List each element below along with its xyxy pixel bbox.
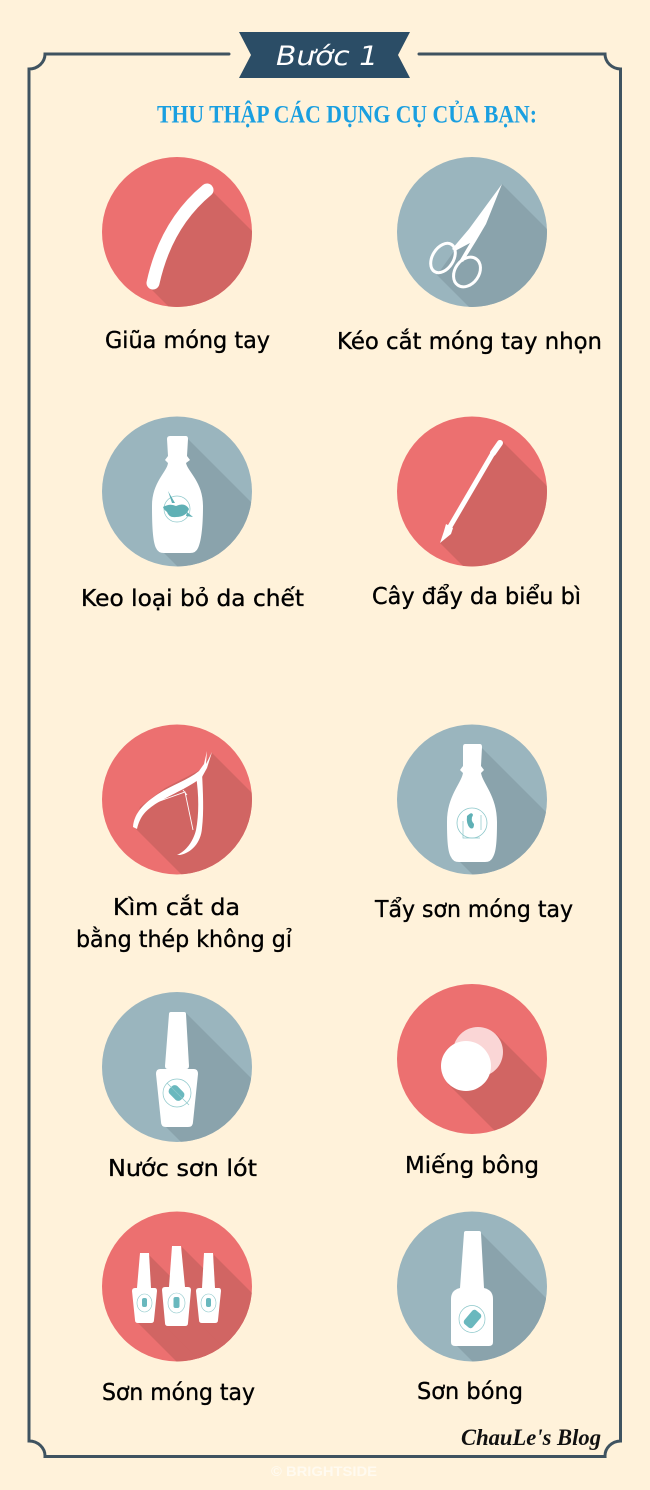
badge circle (397, 157, 547, 307)
watermark: © BRIGHTSIDE (271, 1463, 377, 1479)
item: scissors (339, 157, 600, 354)
icon: nail file (153, 190, 207, 283)
icon: nippers (133, 751, 212, 855)
label: Nước sơn lót (108, 1156, 257, 1182)
long shadows (138, 1247, 252, 1362)
long shadow (460, 748, 546, 874)
label: Kéo cắt móng tay nhọn (337, 328, 602, 355)
label: Sơn bóng (417, 1379, 523, 1405)
long shadow (135, 753, 252, 874)
ribbon text: Bước 1 (276, 41, 378, 72)
long shadow (164, 439, 252, 566)
item: nail polish set (102, 1212, 254, 1406)
badge circle (102, 1212, 252, 1362)
item: cotton pads (397, 984, 547, 1178)
icon: bottle (152, 436, 203, 553)
long shadow (448, 1034, 544, 1130)
label: Tẩy sơn móng tay (374, 897, 573, 923)
label: Miếng bông (405, 1153, 539, 1179)
title: THU THẬP CÁC DỤNG CỤ CỦA BẠN: (157, 100, 537, 128)
label: Giũa móng tay (105, 328, 270, 354)
badge circle (397, 416, 547, 566)
item: nail polish remover (374, 724, 573, 922)
blog signature: ChauLe's Blog (461, 1425, 601, 1450)
item: base coat (102, 992, 257, 1176)
icon: polish bottle (451, 1231, 493, 1346)
long shadow (152, 192, 252, 307)
badge circle (102, 157, 252, 307)
label: Cây đẩy da biểu bì (372, 584, 581, 610)
label: Keo loại bỏ da chết (81, 586, 304, 612)
badge circle (102, 416, 252, 566)
badge circle (102, 992, 252, 1142)
icon: bottle (447, 744, 497, 862)
item: top coat (397, 1212, 547, 1404)
long shadow (457, 1233, 546, 1362)
badge circle (397, 724, 547, 874)
long shadow (440, 442, 547, 566)
item: cuticle nippers (78, 724, 292, 952)
label: Kìm cắt da (113, 894, 240, 921)
ribbon shape (239, 32, 410, 78)
icon: three polish bottles (132, 1246, 221, 1326)
icon: polish bottle (156, 1012, 198, 1127)
badge circle (397, 1212, 547, 1362)
label: Sơn móng tay (102, 1380, 255, 1406)
icon: cotton pads (441, 1027, 503, 1091)
long shadow (437, 184, 547, 307)
icon: cuticle pusher (440, 443, 500, 543)
item: cuticle remover bottle (83, 416, 304, 610)
ribbon heading (239, 32, 410, 78)
item: cuticle pusher (373, 416, 580, 610)
item: nail file (102, 157, 270, 354)
long shadow (166, 1013, 251, 1142)
badge circle (397, 984, 547, 1134)
icon: scissors (426, 184, 502, 292)
label line 2: bằng thép không gỉ (76, 926, 292, 953)
badge circle (102, 724, 252, 874)
